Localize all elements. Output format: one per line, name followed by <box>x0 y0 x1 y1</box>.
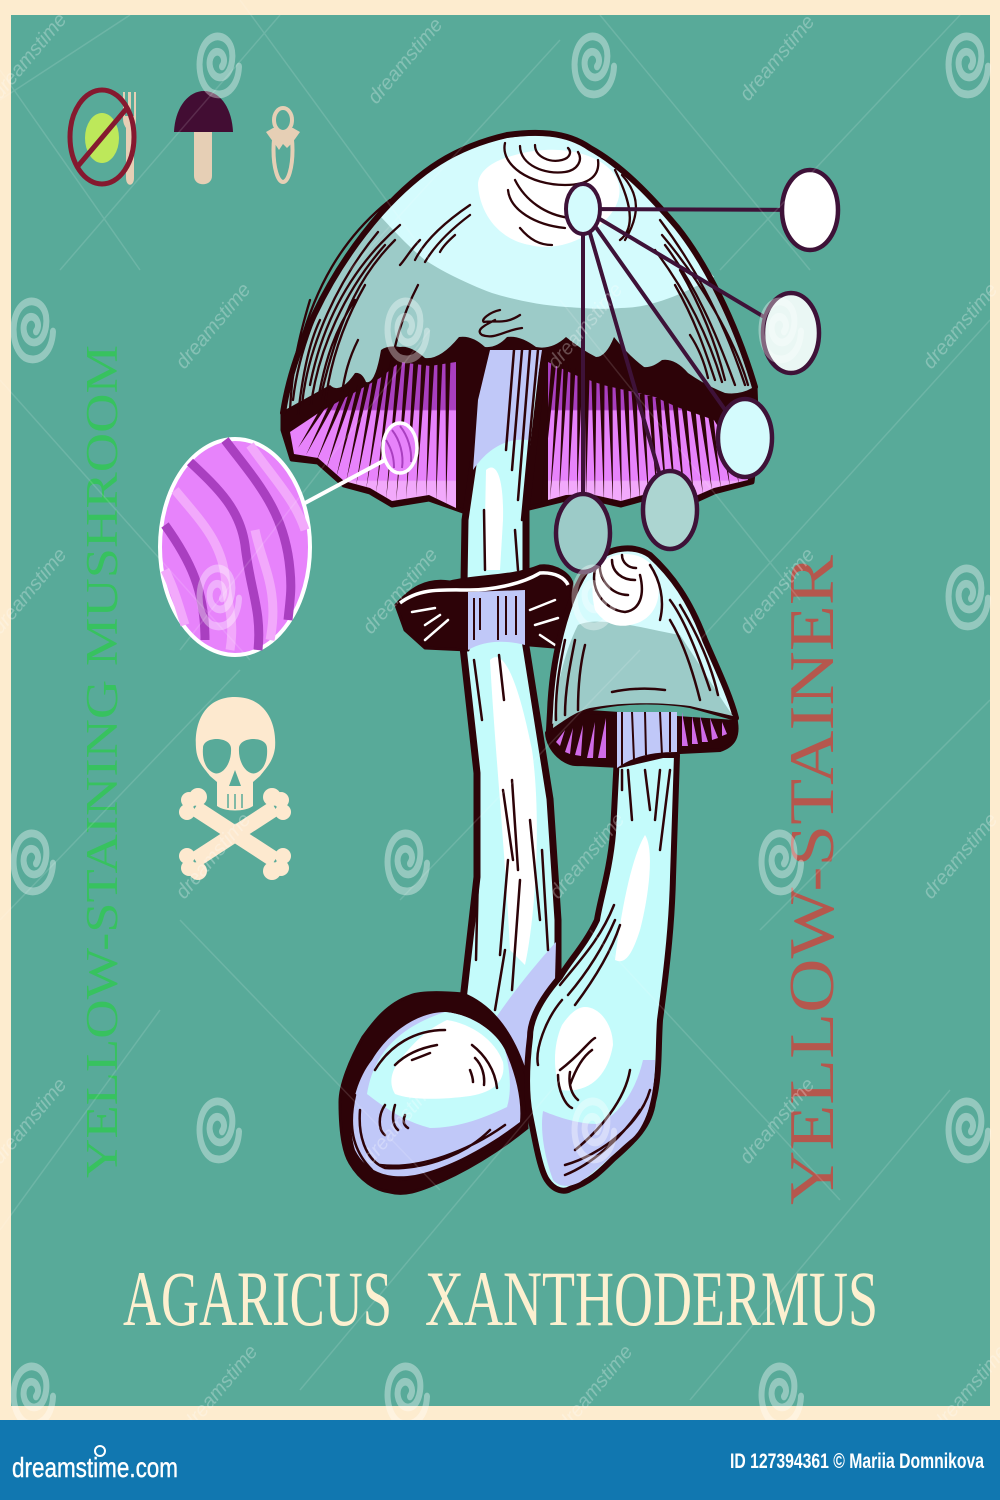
main stem <box>463 348 558 1094</box>
cap light part <box>381 136 714 309</box>
species name: AGARICUS <box>123 1255 392 1342</box>
large mushroom <box>283 133 757 1193</box>
skull and crossbones icon <box>179 697 291 880</box>
callout dot on cap <box>566 184 600 234</box>
watermark pattern: dreamstime <box>358 1074 442 1168</box>
watermark pattern: dreamstime <box>363 14 447 108</box>
connector line <box>305 460 385 503</box>
small stem highlights <box>555 835 650 1091</box>
magnifier: gills detail <box>160 423 417 655</box>
vertical title: yellow-staining mushroom: YELLOW-STAINING MUSHROOM <box>77 345 127 1178</box>
watermark pattern: dreamstime <box>178 1341 262 1435</box>
stem hatching <box>474 350 548 1010</box>
icon: mushroom shape <box>174 91 233 184</box>
watermark pattern: dreamstime <box>918 809 1000 903</box>
stem upper shadow <box>473 350 542 470</box>
watermark pattern: dreamstime <box>358 544 442 638</box>
watermark pattern: dreamstime <box>735 11 819 105</box>
eye sockets <box>203 739 267 809</box>
callout circle: pale teal <box>643 471 697 549</box>
cap hatching <box>290 143 748 415</box>
small cap <box>549 548 736 730</box>
watermark pattern: dreamstime <box>735 544 819 638</box>
ring <box>396 566 572 650</box>
small stem shadows <box>542 1060 655 1186</box>
small stem hatching <box>537 770 670 1175</box>
cap highlight <box>478 150 620 247</box>
watermark pattern: dreamstime <box>553 1341 637 1435</box>
small stem <box>527 755 677 1191</box>
crossbones <box>179 788 291 880</box>
icon: stem ring <box>266 108 300 182</box>
small cap gills <box>556 712 727 758</box>
large cap top <box>283 133 755 415</box>
watermark pattern: dreamstime <box>171 809 255 903</box>
cap shaded lower part <box>285 136 752 410</box>
watermark pattern: dreamstime <box>171 279 255 373</box>
small mushroom <box>527 548 737 1191</box>
watermark pattern: dreamstime <box>545 809 629 903</box>
species name <box>123 1255 878 1342</box>
footer bar <box>0 1420 1000 1500</box>
cap outline <box>283 133 755 413</box>
watermark pattern: dreamstime <box>543 279 627 373</box>
callout lines <box>583 209 810 533</box>
gill lines <box>298 358 739 506</box>
large lens <box>160 439 310 655</box>
icon: not edible <box>70 90 136 185</box>
watermark pattern: dreamstime <box>735 1074 819 1168</box>
bulb <box>340 993 527 1193</box>
footer logo <box>12 1446 178 1483</box>
callout circle: light blue <box>718 399 772 477</box>
callout circle: teal <box>556 494 610 572</box>
small stem top <box>617 712 677 768</box>
stem lower shadow <box>497 942 556 1092</box>
callout circle: white <box>782 170 838 250</box>
small lens <box>383 423 417 473</box>
small cap hatching <box>556 555 718 720</box>
gills <box>290 362 748 508</box>
footer logo: dreamstime.com <box>12 1452 178 1483</box>
callout circle: pale <box>763 293 819 373</box>
large cap underside <box>283 133 757 512</box>
skull <box>196 697 275 810</box>
small cap rim <box>547 710 737 766</box>
stem highlights <box>484 467 537 965</box>
vertical title: yellow-stainer: YELLOW-STAINER <box>776 555 847 1205</box>
watermark pattern: dreamstime <box>918 279 1000 373</box>
